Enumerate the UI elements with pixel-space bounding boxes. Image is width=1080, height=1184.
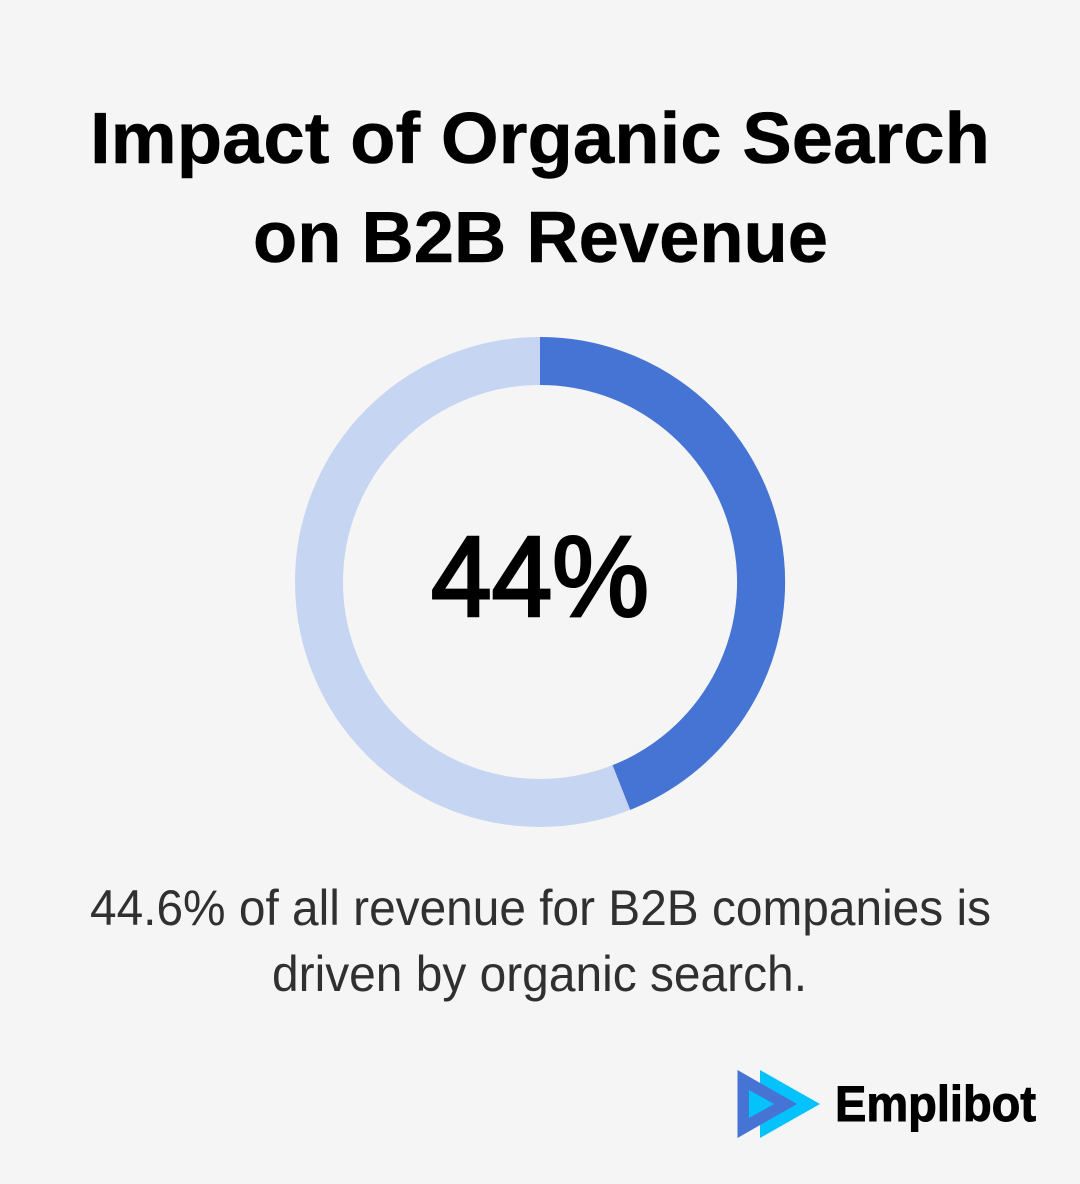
- title: on B2B Revenue: [253, 198, 828, 278]
- icon: play triangles: [738, 1070, 820, 1138]
- title: Impact of Organic Search: [90, 99, 990, 179]
- donut value: 44%: [431, 514, 649, 641]
- title: [90, 99, 990, 278]
- brand logo: [738, 1070, 1036, 1138]
- description text: driven by organic search.: [272, 946, 807, 1002]
- description text: [90, 880, 991, 1002]
- donut chart: 44%: [319, 361, 761, 803]
- description text: 44.6% of all revenue for B2B companies is: [90, 880, 991, 936]
- wordmark: Emplibot: [835, 1076, 1036, 1132]
